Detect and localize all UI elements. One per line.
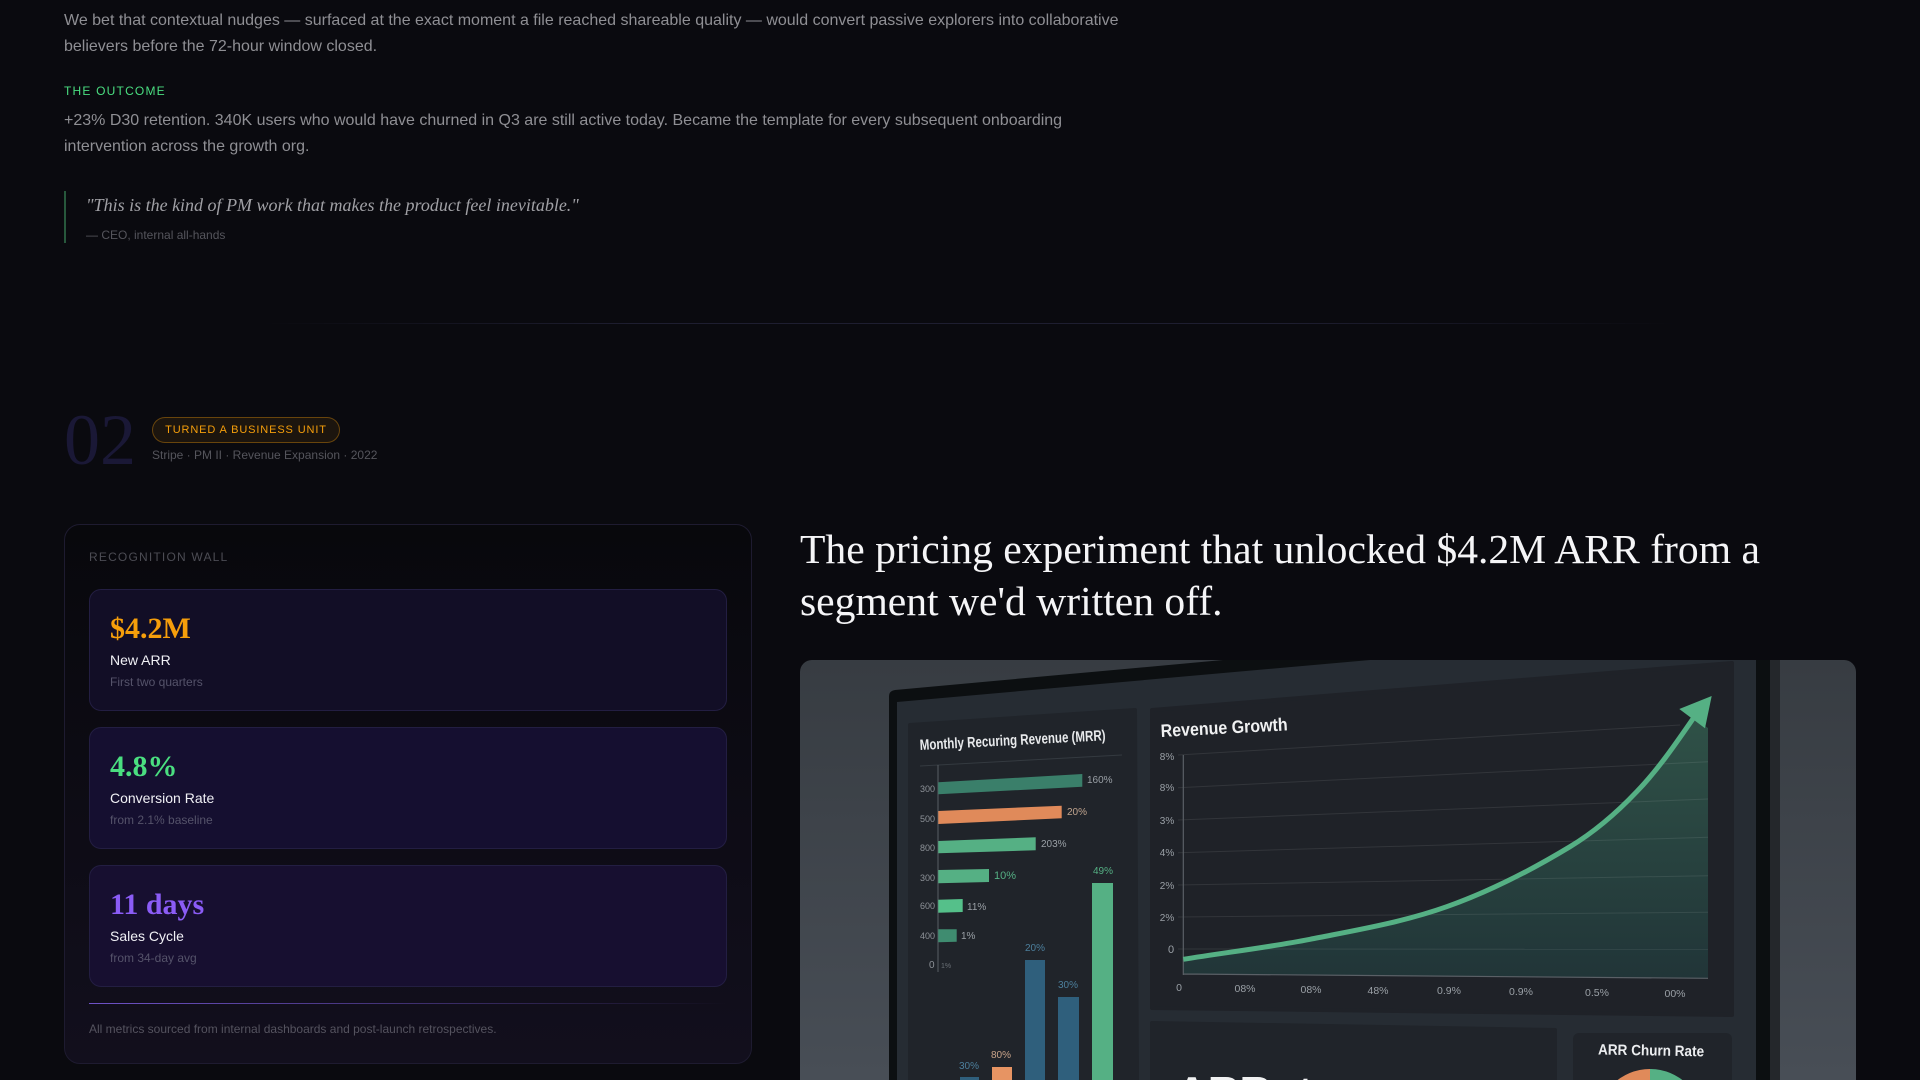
quote attribution: — CEO, internal all-hands xyxy=(86,228,225,242)
revenue x axis labels: 08% xyxy=(1300,984,1322,996)
dashboard image xyxy=(800,660,1856,1080)
revenue y axis labels xyxy=(1160,752,1174,956)
panel footnote: All metrics sourced from internal dashboards and post-launch retrospectives. xyxy=(89,1022,497,1036)
MRR title: Monthly Recuring Revenue (MRR) xyxy=(919,727,1106,754)
revenue growth chart panel xyxy=(1152,663,1732,1015)
case heading: The pricing experiment that unlocked $4.2M ARR from a xyxy=(800,526,1760,572)
horizontal bar labels: 160% xyxy=(1087,775,1113,786)
revenue x axis labels xyxy=(1176,984,1686,997)
churn title: ARR Churn Rate xyxy=(1598,1042,1704,1060)
label: Conversion Rate xyxy=(110,790,214,806)
MRR y axis labels: 800 xyxy=(920,843,935,853)
revenue y axis labels: 0 xyxy=(1168,944,1174,956)
revenue x axis labels: 0.5% xyxy=(1585,987,1609,999)
revenue y axis labels: 8% xyxy=(1160,783,1174,794)
MRR chart panel xyxy=(910,710,1137,1080)
MRR y axis labels: 500 xyxy=(920,814,935,824)
horizontal bars xyxy=(938,774,1082,942)
ARR panel xyxy=(1152,1023,1555,1080)
revenue x axis labels: 0.9% xyxy=(1509,986,1533,998)
revenue y axis labels: 3% xyxy=(1160,816,1174,827)
card: new ARR xyxy=(89,589,727,711)
section meta: Stripe · PM II · Revenue Expansion · 2022 xyxy=(152,448,377,462)
arrow head xyxy=(1679,696,1712,728)
note: First two quarters xyxy=(110,675,203,689)
revenue y axis labels: 2% xyxy=(1160,881,1174,892)
badge: turned a business unit xyxy=(152,417,340,443)
vertical bar labels: 49% xyxy=(1093,866,1113,877)
revenue x axis labels: 08% xyxy=(1234,983,1256,995)
MRR y axis labels: 300 xyxy=(920,873,935,883)
revenue x axis labels: 0.9% xyxy=(1437,985,1461,997)
vertical bar labels: 30% xyxy=(1058,980,1078,991)
horizontal bar labels: 20% xyxy=(1067,807,1087,818)
case heading xyxy=(800,526,1760,624)
revenue area fill xyxy=(1183,718,1708,978)
vertical bar labels: 20% xyxy=(1025,943,1045,954)
vertical bar labels: 80% xyxy=(991,1050,1011,1061)
quote xyxy=(64,191,666,243)
revenue y axis labels: 2% xyxy=(1160,913,1174,924)
vertical bar labels xyxy=(959,866,1113,1072)
quote text: "This is the kind of PM work that makes the product feel inevitable." xyxy=(86,195,579,215)
note: from 2.1% baseline xyxy=(110,813,213,827)
revenue x axis labels: 48% xyxy=(1367,985,1389,997)
MRR y axis labels: 600 xyxy=(920,901,935,911)
horizontal bar labels xyxy=(961,775,1113,942)
horizontal bar labels: 10% xyxy=(994,870,1016,882)
revenue title: Revenue Growth xyxy=(1160,714,1288,741)
case heading: segment we'd written off. xyxy=(800,578,1223,624)
MRR y axis labels: 300 xyxy=(920,784,935,794)
growth curve xyxy=(1183,718,1693,959)
card: sales cycle xyxy=(89,865,727,987)
label: Sales Cycle xyxy=(110,928,184,944)
badge: turned a business unit: TURNED A BUSINESS UNIT xyxy=(165,424,327,436)
churn panel xyxy=(1573,1033,1732,1080)
text block: outcome xyxy=(64,112,1062,155)
card: conversion rate xyxy=(89,727,727,849)
horizontal bar labels: 203% xyxy=(1041,839,1067,850)
revenue y axis labels: 4% xyxy=(1160,848,1174,859)
text block: outcome: +23% D30 retention. 340K users who would have churned in Q3 are still active today. Became the template for every subsequent onboarding xyxy=(64,112,1062,129)
heading: the outcome: THE OUTCOME xyxy=(64,84,166,98)
text block: hypothesis: We bet that contextual nudges — surfaced at the exact moment a file reached shareable quality — would convert passive explorers into collaborative xyxy=(64,12,1119,29)
note: from 34-day avg xyxy=(110,951,197,965)
value: $4.2M xyxy=(110,612,191,645)
vertical bars xyxy=(960,883,1113,1080)
value: 4.8% xyxy=(110,750,178,783)
horizontal bar labels: 11% xyxy=(967,902,986,913)
value: 11 days xyxy=(110,888,204,921)
label: New ARR xyxy=(110,652,171,668)
revenue x axis labels: 0 xyxy=(1176,982,1182,994)
vertical bar labels: 30% xyxy=(959,1061,979,1072)
text block: hypothesis: believers before the 72-hour window closed. xyxy=(64,38,377,55)
MRR y axis labels: 1% xyxy=(941,963,951,970)
pie chart xyxy=(1618,1069,1682,1080)
panel heading: RECOGNITION WALL xyxy=(89,550,228,564)
horizontal bar labels: 1% xyxy=(961,931,976,942)
MRR y axis labels: 400 xyxy=(920,931,935,941)
revenue x axis labels: 00% xyxy=(1664,988,1686,1000)
revenue y axis labels: 8% xyxy=(1160,752,1174,763)
text block: outcome: intervention across the growth org. xyxy=(64,138,309,155)
MRR y axis labels: 0 xyxy=(929,960,935,971)
section number: 02 xyxy=(64,400,136,480)
MRR y axis labels xyxy=(920,784,951,971)
panel: recognition wall xyxy=(64,524,752,1064)
text block: hypothesis xyxy=(64,12,1119,55)
